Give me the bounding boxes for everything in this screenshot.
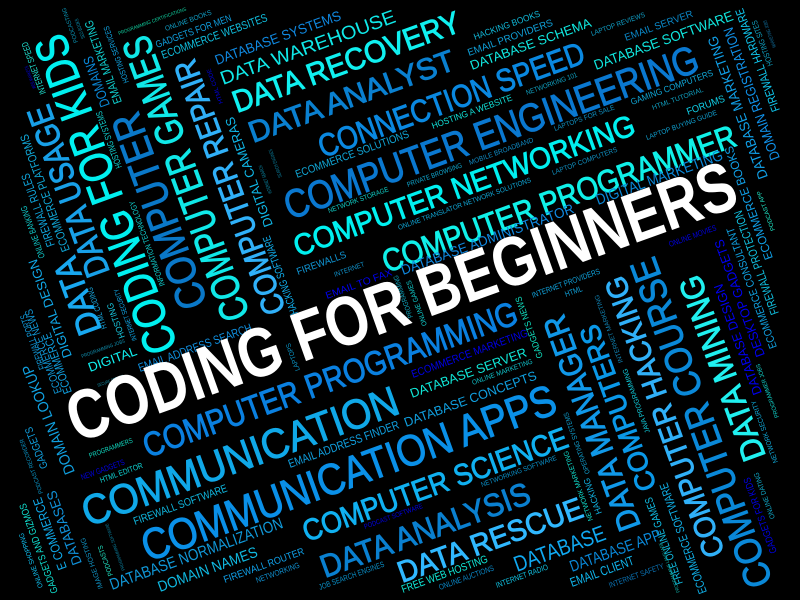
word: DATA ANALYSIS: DATA ANALYSIS bbox=[315, 475, 535, 585]
word: INTERNET PROVIDERS: INTERNET PROVIDERS bbox=[531, 267, 601, 300]
word: PODCASTING: PODCASTING bbox=[61, 6, 80, 43]
word: ONLINE MARKETING: ONLINE MARKETING bbox=[471, 358, 534, 387]
word: DATABASE DESIGN: DATABASE DESIGN bbox=[711, 282, 765, 397]
word: ECOMMERCE CONSULTANT: ECOMMERCE CONSULTANT bbox=[725, 225, 780, 350]
word: MARKETING JOBS: MARKETING JOBS bbox=[762, 19, 778, 48]
word: NETWORK SECURITY: NETWORK SECURITY bbox=[751, 399, 780, 464]
word: HOSTING SERVICES: HOSTING SERVICES bbox=[102, 25, 131, 84]
word: DATABASES: DATABASES bbox=[43, 489, 85, 567]
word: DATABASE SCHEMA: DATABASE SCHEMA bbox=[468, 15, 594, 73]
word: DIGITAL MARKETING: DIGITAL MARKETING bbox=[594, 147, 725, 209]
word: HOSTING: HOSTING bbox=[105, 302, 127, 340]
word: PROGRAMMING LANGUAGE: PROGRAMMING LANGUAGE bbox=[658, 541, 682, 593]
word: COMPUTER: COMPUTER bbox=[102, 106, 216, 316]
word: COMMUNICATION: COMMUNICATION bbox=[75, 377, 405, 535]
word: DATA WAREHOUSE: DATA WAREHOUSE bbox=[218, 7, 399, 90]
word: INTERNET MARKETING: INTERNET MARKETING bbox=[594, 294, 625, 364]
word: ONLINE DATING: ONLINE DATING bbox=[754, 471, 777, 520]
word: PODCAST APP: PODCAST APP bbox=[757, 190, 777, 231]
word: COMPUTER PROGRAMMING: COMPUTER PROGRAMMING bbox=[138, 294, 523, 466]
word: EMAIL ADDRESS FINDER: EMAIL ADDRESS FINDER bbox=[286, 418, 401, 471]
word: GADGETS NEWS: GADGETS NEWS bbox=[513, 295, 545, 360]
word: PROGRAMMING CERTIFICATIONS: PROGRAMMING CERTIFICATIONS bbox=[118, 6, 188, 37]
word: DATA ANALYST: DATA ANALYST bbox=[244, 44, 459, 150]
word: GADGETS: GADGETS bbox=[23, 425, 51, 470]
word: INTERNET SEARCH: INTERNET SEARCH bbox=[258, 164, 274, 194]
word: EMAIL ADDRESS SEARCH: EMAIL ADDRESS SEARCH bbox=[136, 321, 254, 375]
word: OPERATING SYSTEMS: OPERATING SYSTEMS bbox=[563, 411, 592, 475]
word: IMAGE HOSTING: IMAGE HOSTING bbox=[80, 537, 105, 590]
word: MOBILE BROADBAND: MOBILE BROADBAND bbox=[468, 137, 535, 167]
word: ECOMMERCE BOOKS: ECOMMERCE BOOKS bbox=[722, 144, 776, 262]
word: FORUMS: FORUMS bbox=[685, 94, 727, 118]
word: HOSTING SITES: HOSTING SITES bbox=[750, 19, 775, 67]
word: INFORMATION TECHNOLOGY: INFORMATION TECHNOLOGY bbox=[127, 199, 167, 287]
word: COMPUTER PROGRAMMER: COMPUTER PROGRAMMER bbox=[377, 118, 741, 280]
word: COMPUTER SCIENCE: COMPUTER SCIENCE bbox=[298, 422, 573, 549]
word: CONNECTION SPEED: CONNECTION SPEED bbox=[313, 35, 589, 165]
word: SEARCH ENGINES: SEARCH ENGINES bbox=[268, 148, 284, 178]
word: FREE WEB HOSTING: FREE WEB HOSTING bbox=[400, 553, 490, 596]
word: LAPTOP COMPUTERS: LAPTOP COMPUTERS bbox=[551, 147, 619, 177]
word: ECOMMERCE NEWS: ECOMMERCE NEWS bbox=[23, 307, 65, 395]
word: PODCASTS: PODCASTS bbox=[97, 544, 115, 577]
word: ONLINE SHOPPING: ONLINE SHOPPING bbox=[18, 532, 45, 589]
word: HACKING: HACKING bbox=[581, 477, 604, 516]
word: PROGRAMMING JOBS: PROGRAMMING JOBS bbox=[81, 338, 126, 360]
word: HTML TUTORIAL: HTML TUTORIAL bbox=[651, 87, 705, 112]
word: DATABASE NORMALIZATION: DATABASE NORMALIZATION bbox=[108, 515, 285, 594]
word: ONLINE BOOKS: ONLINE BOOKS bbox=[164, 9, 213, 33]
word: EMAIL PROVIDERS: EMAIL PROVIDERS bbox=[466, 18, 555, 59]
word: E COMMERCE: E COMMERCE bbox=[30, 495, 70, 572]
word: LAPTOP REVIEWS: LAPTOP REVIEWS bbox=[590, 12, 647, 38]
word: FIREWALLS: FIREWALLS bbox=[295, 250, 348, 278]
word: ECOMMERCE WEBSITES: ECOMMERCE WEBSITES bbox=[160, 12, 270, 62]
word: ECOMMERCE SOFTWARE: ECOMMERCE SOFTWARE bbox=[657, 481, 710, 596]
word: DATA USAGE: DATA USAGE bbox=[20, 100, 118, 282]
word: DATABASE SYSTEMS: DATABASE SYSTEMS bbox=[213, 7, 343, 68]
word: FIREWALL ROUTER: FIREWALL ROUTER bbox=[222, 546, 306, 586]
word: COMPUTER NETWORKING: COMPUTER NETWORKING bbox=[289, 109, 640, 264]
word: HACKING SOFTWARE: HACKING SOFTWARE bbox=[261, 234, 301, 316]
word: ECOMMERCE SOLUTIONS: ECOMMERCE SOLUTIONS bbox=[294, 129, 411, 181]
word: JOB SEARCH ENGINES: JOB SEARCH ENGINES bbox=[318, 560, 386, 592]
word: COMPUTER ENGINEERING: COMPUTER ENGINEERING bbox=[278, 37, 705, 228]
word: EMAIL MARKETING: EMAIL MARKETING bbox=[82, 18, 125, 106]
word: ONLINE BANKING: ONLINE BANKING bbox=[19, 205, 47, 260]
word: COMPUTER HACKING: COMPUTER HACKING bbox=[599, 272, 732, 562]
word: ONLINE MOVIES: ONLINE MOVIES bbox=[668, 223, 718, 249]
word: LAPTOPS FOR SALE: LAPTOPS FOR SALE bbox=[553, 104, 616, 133]
word: NEW GADGETS: NEW GADGETS bbox=[80, 458, 126, 482]
word: INTERNET SECURITY: INTERNET SECURITY bbox=[113, 287, 139, 342]
word: GADGETS FOR MEN: GADGETS FOR MEN bbox=[154, 13, 233, 51]
word: NETWORK MARKETING: NETWORK MARKETING bbox=[563, 450, 595, 522]
word: DOMAIN REGISTRATION: DOMAIN REGISTRATION bbox=[720, 25, 783, 162]
word: ONLINE TRANSLATOR NETWORK SOLUTIONS: ONLINE TRANSLATOR NETWORK SOLUTIONS bbox=[397, 177, 532, 232]
word: DATABASE ADMINISTRATOR: DATABASE ADMINISTRATOR bbox=[399, 200, 576, 278]
word: FIREWALL SOFTWARE: FIREWALL SOFTWARE bbox=[132, 483, 229, 528]
word: DIGITAL: DIGITAL bbox=[86, 343, 139, 375]
word: WEB MARKETS: WEB MARKETS bbox=[24, 64, 38, 89]
word: HOSTING SYSTEMS: HOSTING SYSTEMS bbox=[94, 110, 124, 170]
word: DATA MINING: DATA MINING bbox=[671, 270, 773, 466]
word: ECOMMERCE: ECOMMERCE bbox=[40, 331, 75, 396]
word: DATABASE SOFTWARE: DATABASE SOFTWARE bbox=[592, 8, 735, 73]
word: COMPUTER REPAIR: COMPUTER REPAIR bbox=[167, 55, 293, 320]
word: SEO BOOKS: SEO BOOKS bbox=[74, 17, 87, 39]
word: NETWORKING 101: NETWORKING 101 bbox=[525, 72, 579, 97]
word: HTML: HTML bbox=[564, 284, 584, 299]
word: EMAIL SERVER: EMAIL SERVER bbox=[623, 9, 695, 44]
word: DATABASE SERVER: DATABASE SERVER bbox=[408, 345, 529, 401]
word: DATABASE CONCEPTS: DATABASE CONCEPTS bbox=[402, 368, 539, 430]
word: GAMING COMPUTERS: GAMING COMPUTERS bbox=[629, 68, 714, 107]
word: PROGRAMMERS: PROGRAMMERS bbox=[88, 437, 134, 460]
word: EMAIL CLIENT: EMAIL CLIENT bbox=[568, 553, 636, 590]
word: DATABASE: DATABASE bbox=[510, 520, 609, 577]
word: SECURE SERVER: SECURE SERVER bbox=[97, 373, 125, 388]
word: HTML EDITOR: HTML EDITOR bbox=[99, 461, 144, 485]
word: DESKTOP GADGETS: DESKTOP GADGETS bbox=[711, 237, 768, 359]
word: FIREWALL PORTS: FIREWALL PORTS bbox=[19, 312, 49, 371]
word: FIREWALL PROTECTION: FIREWALL PROTECTION bbox=[731, 209, 782, 317]
word: JAVA PROGRAMMING: JAVA PROGRAMMING bbox=[622, 367, 652, 434]
word: DATA RESCUE: DATA RESCUE bbox=[393, 492, 588, 590]
word: ONLINE AUCTIONS: ONLINE AUCTIONS bbox=[438, 564, 495, 592]
word: LAPTOPS: LAPTOPS bbox=[285, 342, 302, 372]
word: FIREWALL RULES: FIREWALL RULES bbox=[18, 172, 58, 249]
word: HOSTING A WEBSITE: HOSTING A WEBSITE bbox=[430, 92, 514, 131]
word: EMAIL TO FAX: EMAIL TO FAX bbox=[324, 267, 394, 302]
word: DATABASE MARKETING: DATABASE MARKETING bbox=[704, 34, 771, 181]
word: HTML CODE: HTML CODE bbox=[207, 68, 225, 104]
word: HACKING BOOKS: HACKING BOOKS bbox=[472, 9, 541, 42]
word: PROGRAMMING: PROGRAMMING bbox=[393, 274, 415, 319]
word: COMPUTERS: COMPUTERS bbox=[574, 321, 663, 496]
word: PROGRAMMER JOBS: PROGRAMMER JOBS bbox=[756, 363, 781, 418]
word: COMPUTER COURSE: COMPUTER COURSE bbox=[623, 252, 781, 593]
word: NETWORKING: NETWORKING bbox=[255, 561, 301, 585]
word: DIGITAL DESIGN: DIGITAL DESIGN bbox=[25, 257, 75, 360]
word: NETWORKING SOFTWARE: NETWORKING SOFTWARE bbox=[480, 455, 558, 489]
word: INTERNET SPEED: INTERNET SPEED bbox=[20, 40, 48, 96]
word: DOMAINS: DOMAINS bbox=[80, 54, 113, 109]
word: DATA: DATA bbox=[46, 252, 110, 340]
word: INTERNET RADIO: INTERNET RADIO bbox=[495, 563, 549, 590]
word: PODCAST RECORDER: PODCAST RECORDER bbox=[19, 437, 45, 494]
word: DOMAIN NAMES: DOMAIN NAMES bbox=[156, 544, 260, 596]
word: DOMAIN LOOKUP: DOMAIN LOOKUP bbox=[19, 362, 79, 477]
word: HTML CODING: HTML CODING bbox=[85, 286, 109, 330]
word: INTERNET SAFETY: INTERNET SAFETY bbox=[608, 561, 666, 590]
word: PRIVATE BROWSING: PRIVATE BROWSING bbox=[406, 162, 463, 189]
word: ONLINE GAMES: ONLINE GAMES bbox=[406, 279, 429, 327]
word: INTERNET: INTERNET bbox=[333, 261, 366, 279]
word: DIGITAL CAMERAS: DIGITAL CAMERAS bbox=[222, 115, 276, 229]
word: LAPTOP BUYING GUIDE: LAPTOP BUYING GUIDE bbox=[645, 110, 718, 142]
word: COMMUNICATION APPS: COMMUNICATION APPS bbox=[135, 376, 563, 571]
word: ECOMMERCE MARKETING: ECOMMERCE MARKETING bbox=[410, 327, 530, 381]
word: DATABASE APP: DATABASE APP bbox=[568, 527, 664, 576]
word: DATA RECOVERY: DATA RECOVERY bbox=[227, 5, 465, 120]
word: DATA MANAGER: DATA MANAGER bbox=[536, 310, 648, 536]
word: PROGRAMMING SOFTWARE: PROGRAMMING SOFTWARE bbox=[104, 523, 126, 571]
word: NETWORK STORAGE: NETWORK STORAGE bbox=[327, 186, 390, 215]
word: FREE ONLINE GAMES: FREE ONLINE GAMES bbox=[643, 496, 686, 586]
word: GADGETS AND GIZMOS: GADGETS AND GIZMOS bbox=[18, 501, 61, 595]
word: PODCAST SOFTWARE: PODCAST SOFTWARE bbox=[363, 503, 424, 531]
word: ECOMMERCE PLATFORMS: ECOMMERCE PLATFORMS bbox=[17, 132, 73, 254]
word: GADGETS FOR KIDS: GADGETS FOR KIDS bbox=[742, 476, 780, 555]
